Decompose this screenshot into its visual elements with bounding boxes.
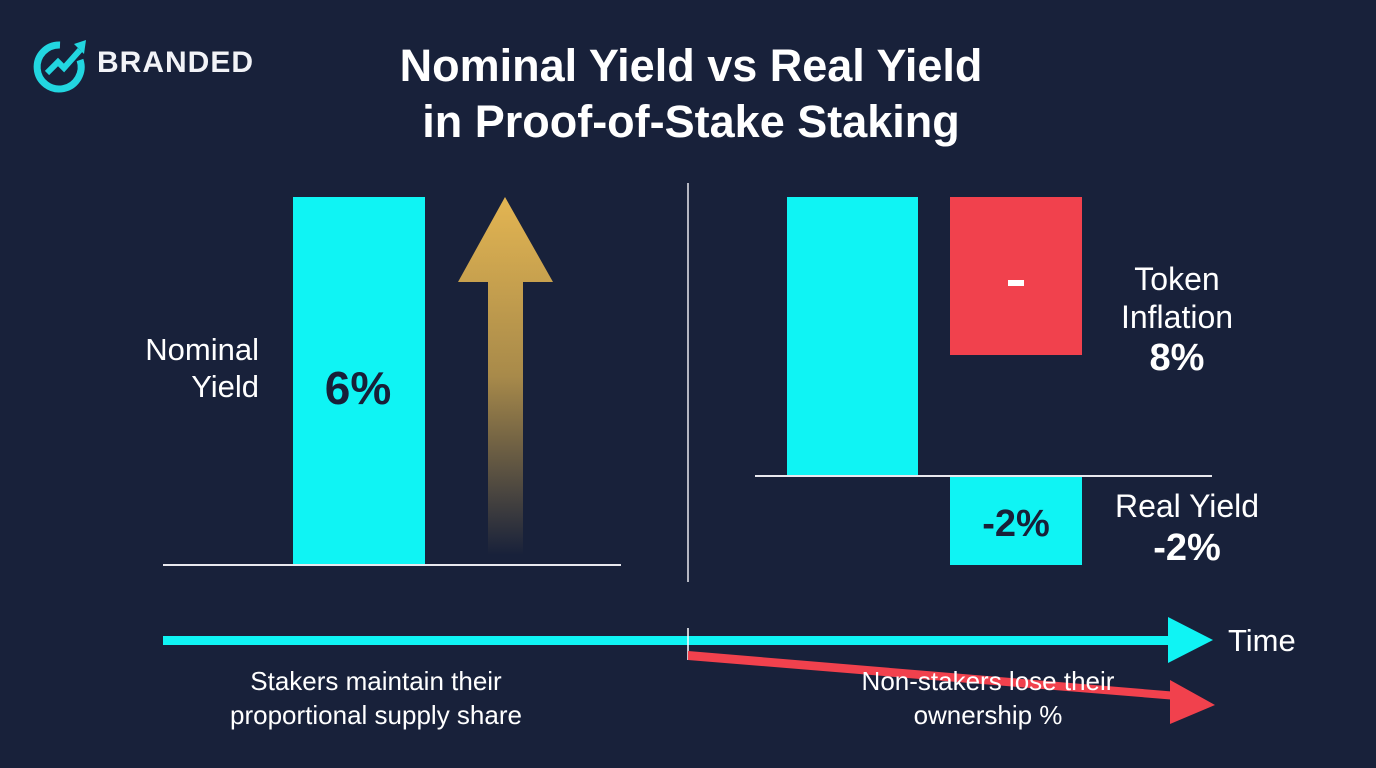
label: real yield: Real Yield xyxy=(1115,488,1259,524)
label: token inflation xyxy=(1121,261,1233,379)
text: non-stakers: Non-stakers lose their xyxy=(862,666,1115,696)
arrow: time xyxy=(163,617,1296,663)
logo: BRANDED xyxy=(97,46,254,79)
bar: nominal xyxy=(787,197,918,475)
label: real yield: -2% xyxy=(1153,527,1221,569)
bar: 6%: 6% xyxy=(325,362,391,414)
label: nominal yield xyxy=(145,332,259,404)
label: real yield xyxy=(1115,488,1259,569)
text: stakers: proportional supply share xyxy=(230,700,522,730)
panel: real yield xyxy=(755,197,1259,569)
label: token inflation: Inflation xyxy=(1121,299,1233,335)
bar: real yield xyxy=(950,477,1082,565)
text: non-stakers: ownership % xyxy=(914,700,1062,730)
text: non-stakers xyxy=(862,666,1115,730)
label: token inflation: 8% xyxy=(1150,337,1204,379)
panel: nominal yield xyxy=(145,197,621,565)
arrow: non-stakers xyxy=(688,628,1215,724)
text: stakers: Stakers maintain their xyxy=(250,666,502,696)
label: nominal yield: Nominal xyxy=(145,332,259,367)
title: Nominal Yield vs Real Yield xyxy=(400,40,982,91)
label: nominal yield: Yield xyxy=(191,369,259,404)
bar: 6% xyxy=(293,197,425,565)
bar: real yield: -2% xyxy=(982,503,1050,545)
label: token inflation: Token xyxy=(1134,261,1220,297)
title xyxy=(400,40,982,147)
bar: inflation xyxy=(950,197,1082,355)
arrow: gold up xyxy=(458,197,553,555)
arrow: time: Time xyxy=(1228,623,1296,658)
text: stakers xyxy=(230,666,522,730)
title: in Proof-of-Stake Staking xyxy=(422,96,960,147)
logo xyxy=(37,40,254,89)
